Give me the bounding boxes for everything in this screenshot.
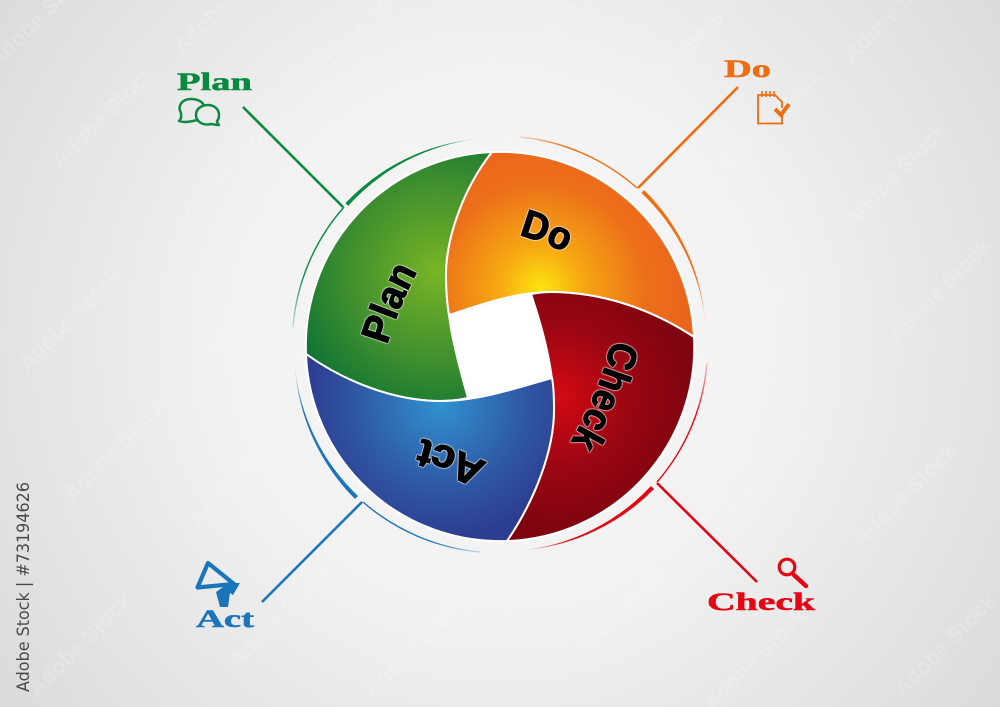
segment: plan: [305, 151, 491, 400]
segment: check: [508, 291, 695, 542]
watermark pattern: Adobe Stock: [888, 588, 1000, 701]
watermark pattern: Adobe Stock: [883, 233, 997, 346]
segment: act: Act: [414, 437, 488, 485]
watermark pattern: Adobe Stock: [13, 263, 127, 376]
segment: do: Do: [519, 208, 572, 251]
watermark pattern: Adobe Stock: [23, 588, 137, 701]
segment: act: [305, 354, 555, 542]
watermark pattern: Adobe Stock: [678, 278, 792, 391]
ring: do: [520, 137, 705, 320]
arrow line: do: [638, 87, 738, 188]
watermark pattern: Adobe Stock: [723, 408, 837, 521]
callout: act: [196, 502, 362, 633]
icon: notepad with tick: [758, 91, 789, 124]
callout: do: [638, 56, 789, 188]
segment: check: Check: [569, 342, 638, 454]
watermark pattern: Adobe Stock: [223, 560, 337, 673]
heading: do: Do: [724, 56, 771, 83]
watermark pattern: Adobe Stock: [558, 560, 672, 673]
watermark pattern: Adobe Stock: [548, 248, 662, 361]
stock credit: Adobe Stock | #73194626: [14, 482, 34, 692]
arrow line: plan: [243, 107, 343, 207]
arrow line: act: [262, 502, 362, 602]
segment: plan: Plan: [360, 264, 418, 344]
heading: check: Check: [707, 589, 815, 616]
watermark pattern: Adobe Stock: [848, 438, 962, 551]
ring: plan: [293, 139, 477, 327]
ring: check: [525, 363, 707, 550]
watermark pattern: Adobe Stock: [58, 393, 172, 506]
watermark pattern: Adobe Stock: [198, 248, 312, 361]
icon: megaphone: [198, 563, 240, 607]
segment: do: [445, 151, 695, 336]
watermark pattern: Adobe Stock: [183, 418, 297, 531]
icon: magnifier: [779, 559, 806, 586]
cycle wheel: [305, 151, 695, 542]
watermark pattern: Adobe Stock: [508, 108, 622, 221]
callout: check: [657, 483, 815, 616]
watermark pattern: Adobe Stock: [713, 63, 827, 176]
heading: plan: Plan: [177, 69, 252, 96]
watermark pattern: Adobe Stock: [173, 108, 287, 221]
centre white square: [449, 294, 552, 398]
heading: act: Act: [196, 606, 255, 633]
watermark pattern: Adobe Stock: [393, 50, 507, 163]
arrow line: check: [657, 483, 757, 582]
icon: speech bubbles: [179, 99, 219, 125]
outer ring arcs: [293, 137, 707, 552]
watermark pattern: Adobe Stock: [46, 60, 160, 173]
watermark pattern: Adobe Stock: [358, 588, 472, 701]
watermark pattern: Adobe Stock: [838, 118, 952, 231]
ring: act: [295, 368, 480, 552]
callout: plan: [177, 69, 343, 207]
